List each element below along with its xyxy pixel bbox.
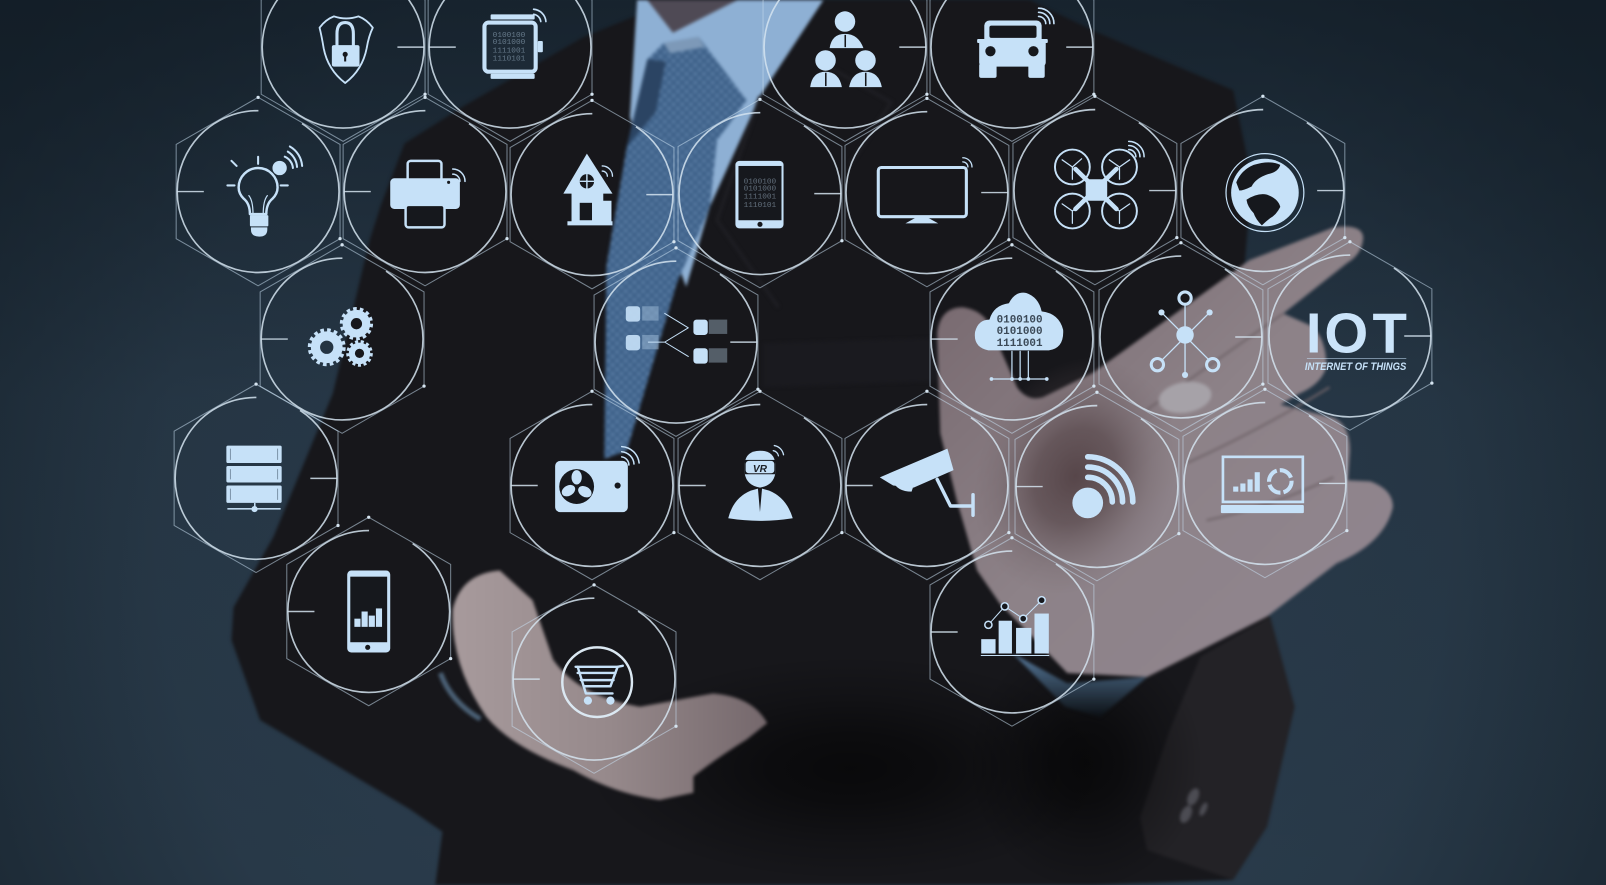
dark fold under wrist xyxy=(968,635,1203,885)
finger creases xyxy=(1147,313,1334,520)
icon: television xyxy=(878,158,972,223)
icon: house xyxy=(563,154,612,225)
hexagon cell: VR user xyxy=(648,374,872,597)
icon: printer xyxy=(390,161,465,227)
icon: smart watch: 1110101 xyxy=(493,55,526,63)
lower jacket shadow xyxy=(584,656,1116,881)
icon: padlocks network xyxy=(626,306,727,364)
icon: drone xyxy=(1055,141,1144,228)
hexagon cell: connected car xyxy=(900,0,1124,159)
hexagon cell: server xyxy=(144,366,368,590)
hexagon cell: smart bulb xyxy=(146,80,370,303)
icon: laptop dashboard xyxy=(1221,457,1304,513)
icon: car xyxy=(977,8,1054,78)
icon: gears xyxy=(310,309,371,365)
icon: bar chart xyxy=(981,597,1049,656)
icon: padlock shield xyxy=(320,16,373,83)
icon: cloud with binary: 0100100 xyxy=(997,315,1043,327)
icon: smart watch: 0101000 xyxy=(493,39,526,47)
hexagon cell: smart home xyxy=(480,83,704,307)
hexagon cell: mobile analytics xyxy=(257,500,481,723)
hexagon cell: air conditioner xyxy=(480,374,704,597)
hexagon cell: security shield xyxy=(231,0,455,159)
lapel edge xyxy=(717,61,891,307)
right shirt cuff xyxy=(1013,653,1147,717)
icon: tablet: 1111001 xyxy=(744,194,777,202)
icon: fan unit xyxy=(555,447,639,512)
IOT heading: INTERNET OF THINGS xyxy=(1305,361,1407,373)
icon: smart watch: 1111001 xyxy=(493,47,526,55)
IOT heading: IOT xyxy=(1306,301,1407,364)
hexagon cell: drone xyxy=(983,79,1207,302)
icon: CCTV camera xyxy=(880,449,973,515)
icon: smart watch xyxy=(484,9,546,79)
icon: tablet: 1110101 xyxy=(744,202,777,210)
jacket pocket xyxy=(763,338,947,387)
icon: globe xyxy=(1226,154,1304,232)
icon: tablet xyxy=(735,161,784,228)
icon: VR person xyxy=(728,446,793,521)
hexagon cell: network nodes xyxy=(1069,225,1293,449)
hexagon cell: IOT label xyxy=(1238,224,1462,448)
thumbnail xyxy=(1156,378,1214,417)
neck xyxy=(647,0,737,33)
icon: tablet: 0101000 xyxy=(744,186,777,194)
necktie xyxy=(604,37,747,459)
hexagon cell: tablet xyxy=(648,82,872,306)
hexagon cell: smart printer xyxy=(313,80,537,303)
hexagon cell: growth chart xyxy=(900,520,1124,744)
hexagon cell: wifi xyxy=(985,375,1209,598)
hexagon cell: analytics laptop xyxy=(1153,372,1377,595)
icon: server stack xyxy=(226,446,282,512)
sleeve button cluster xyxy=(1178,786,1209,825)
hexagon cell: gears xyxy=(230,227,454,451)
hexagon cell: cloud data xyxy=(900,227,1124,451)
icon: shopping cart xyxy=(562,647,632,717)
hexagon cell: globe xyxy=(1151,79,1375,302)
icon: smartphone with chart xyxy=(347,571,390,652)
icon: VR person: VR xyxy=(753,464,768,475)
left hand xyxy=(453,571,767,800)
hexagon cell: shopping cart xyxy=(482,567,706,791)
left shirt cuff xyxy=(440,673,480,719)
icon: three people xyxy=(810,11,882,87)
palm shadow xyxy=(935,324,1216,629)
hexagon cell: secure network locks xyxy=(564,230,788,454)
hexagon cell: smart watch xyxy=(398,0,622,159)
icon: light bulb xyxy=(227,146,302,237)
right hand with fingers xyxy=(937,227,1393,677)
icon: wifi signal xyxy=(1072,457,1133,518)
suit jacket and sleeve xyxy=(231,0,1295,885)
shirt, tie and jacket details xyxy=(440,0,1393,825)
icon: cloud with binary: 1111001 xyxy=(997,338,1043,350)
shirt collar xyxy=(630,0,823,287)
hexagon cell: team hierarchy xyxy=(733,0,957,159)
hexagon cell: security camera xyxy=(815,374,1039,597)
hexagon cell: smart tv xyxy=(815,81,1039,305)
icon: smart watch: 0100100 xyxy=(493,32,526,40)
icon: cloud with binary: 0101000 xyxy=(997,326,1043,338)
icon: node graph xyxy=(1151,292,1219,378)
icon: tablet: 0100100 xyxy=(744,178,777,186)
icon: cloud with binary xyxy=(975,293,1063,381)
